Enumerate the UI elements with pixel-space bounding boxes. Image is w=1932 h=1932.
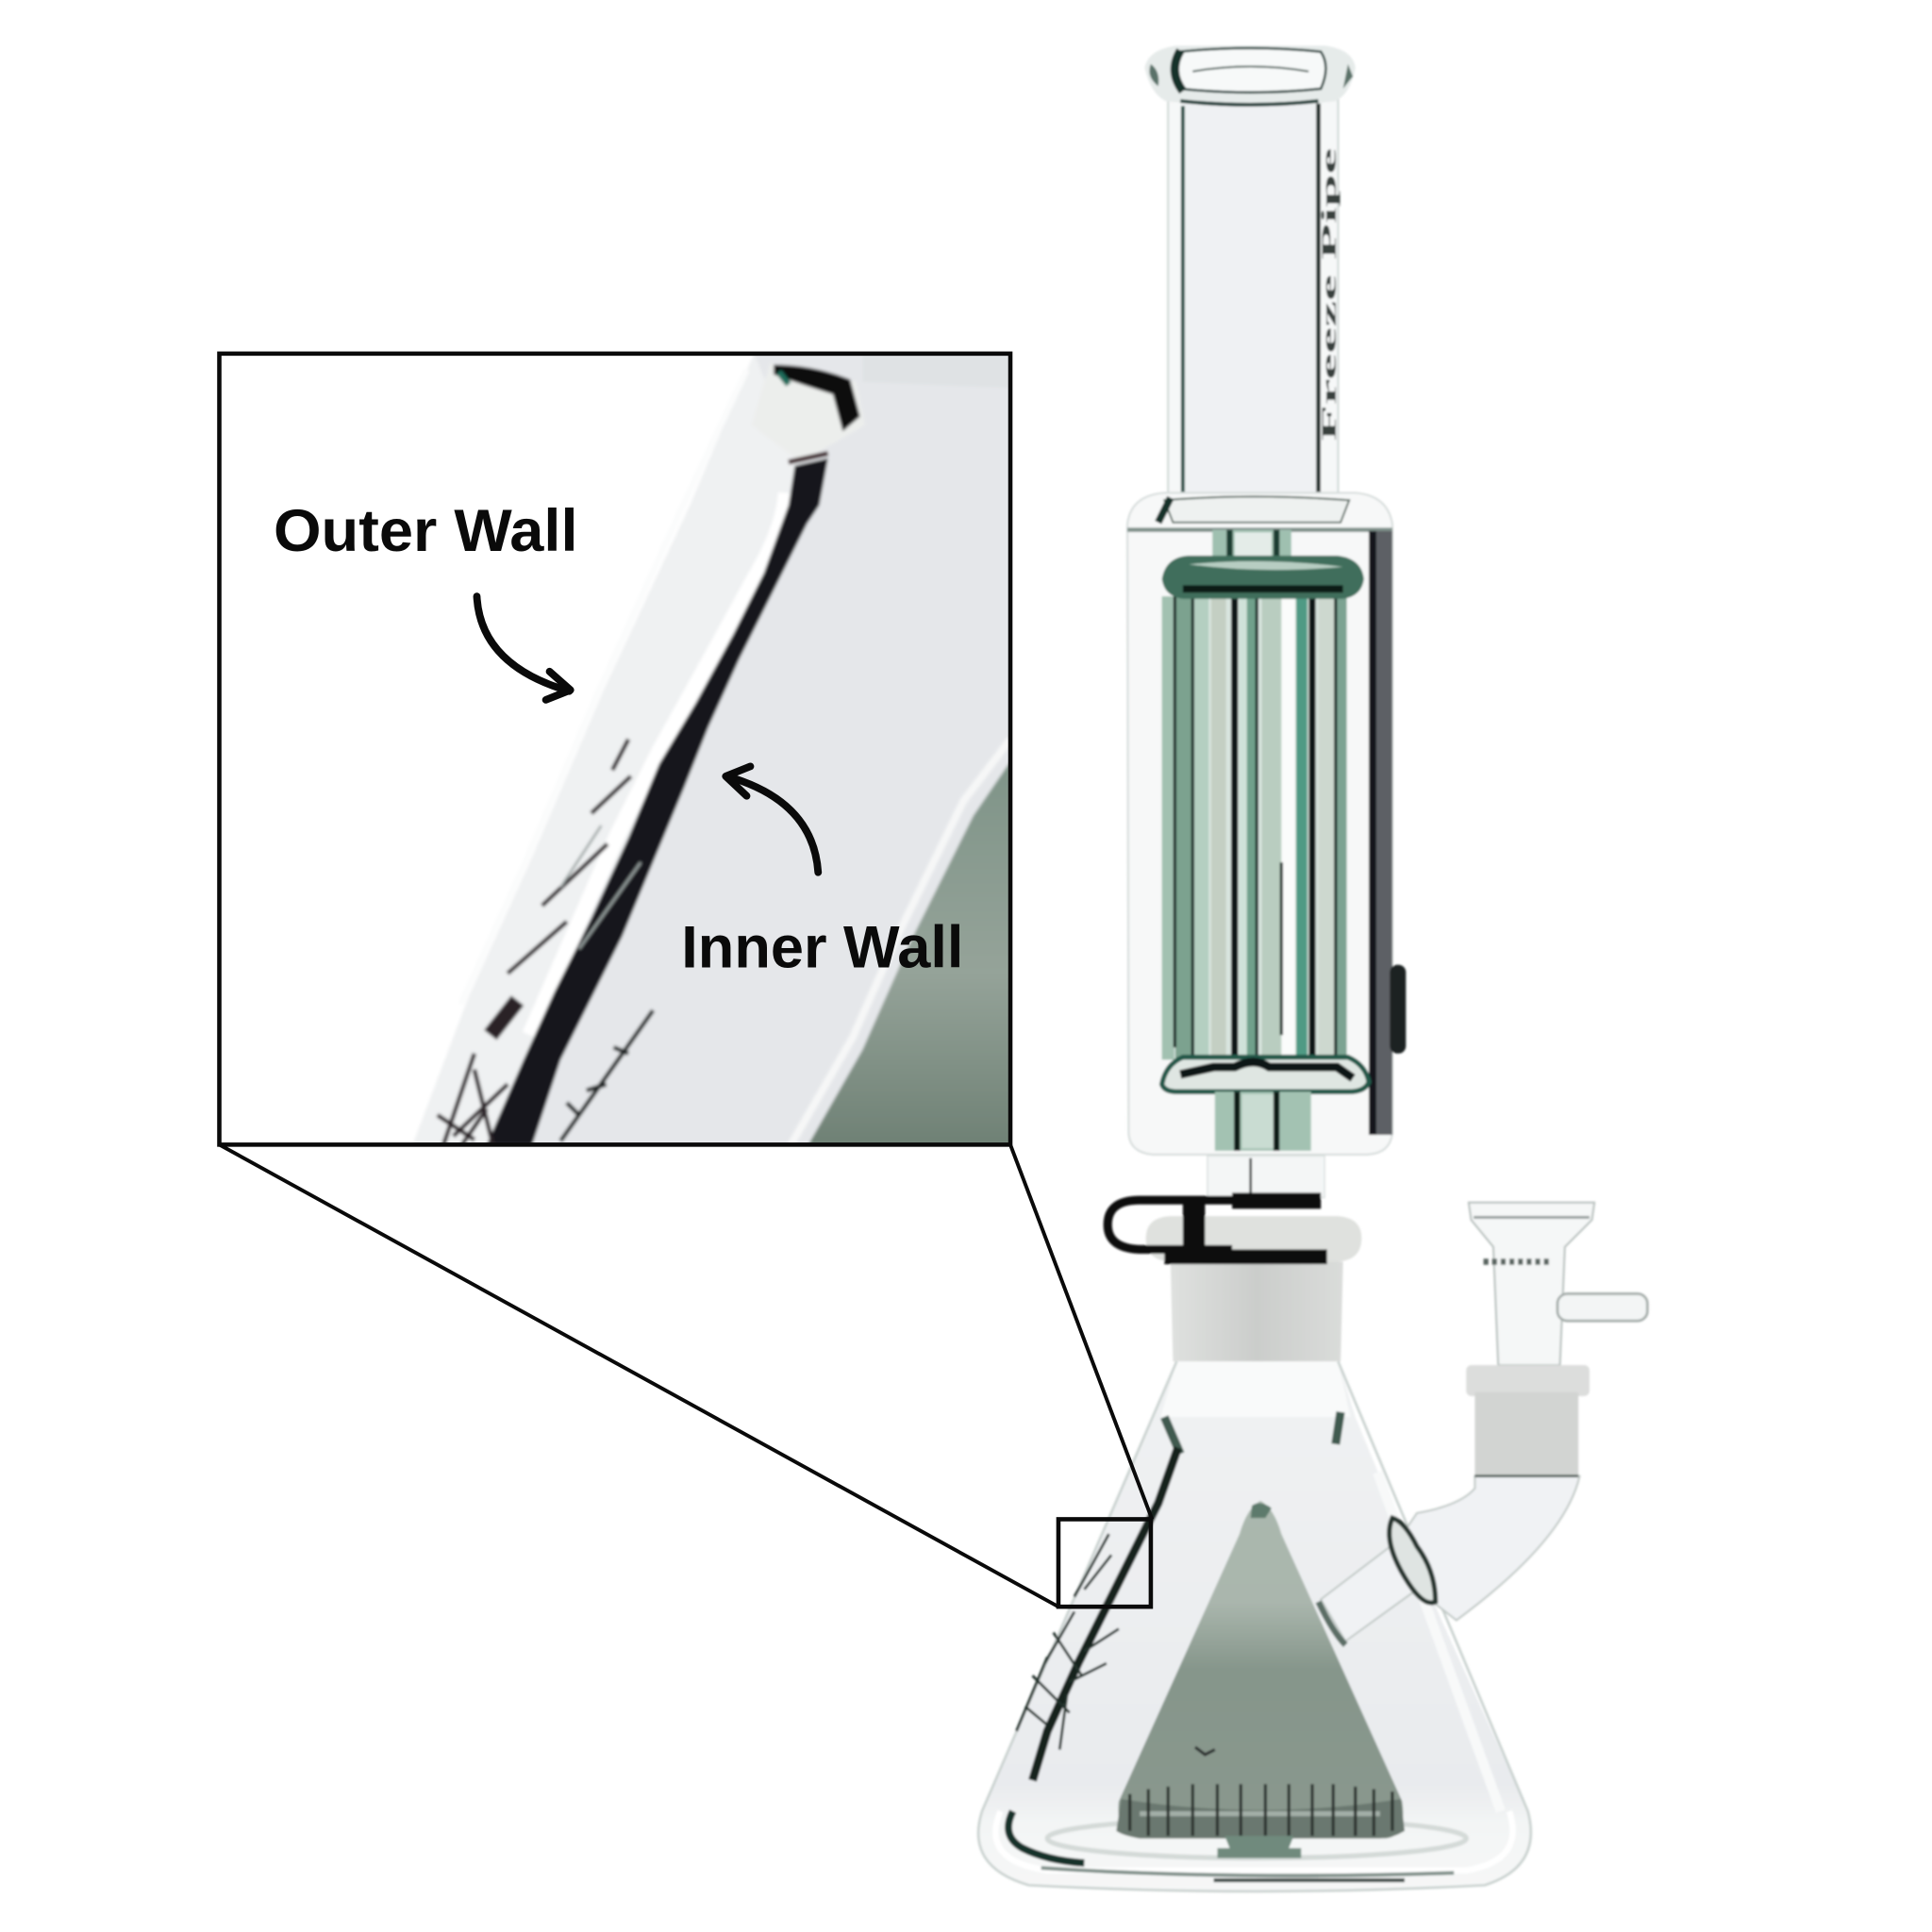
beaker base glass xyxy=(978,1361,1531,1891)
callout: connector lines to magnified view xyxy=(219,1144,1152,1607)
heading label: Inner Wall: Inner Wall xyxy=(681,914,963,980)
arrow: to outer wall xyxy=(476,596,571,700)
mouthpiece collar xyxy=(1144,45,1356,106)
arrow: to inner wall xyxy=(725,766,818,873)
black keck clip xyxy=(1108,1192,1327,1264)
ground joint stem xyxy=(1146,1156,1361,1361)
chamber knob xyxy=(1390,965,1406,1054)
callout: small detail box on beaker xyxy=(1058,1519,1151,1607)
sealed top of wall xyxy=(802,380,855,425)
dark back wall of chamber xyxy=(1375,531,1392,1135)
frosted female joint xyxy=(1466,1365,1590,1476)
etched branches xyxy=(438,740,653,1144)
tube stripes xyxy=(1162,596,1174,1059)
white highlight xyxy=(530,492,786,1035)
joint and bowl on side arm xyxy=(1466,1203,1647,1476)
heading label: Outer Wall: Outer Wall xyxy=(274,498,578,564)
outer wall band xyxy=(413,354,801,1144)
cone percolator xyxy=(1116,1501,1405,1858)
green percolator wedge xyxy=(808,761,1010,1144)
infographic canvas xyxy=(217,45,1650,1894)
vertical brand text on neck: Freeze Pipe xyxy=(1317,147,1341,441)
black inner wall line xyxy=(487,458,828,1144)
bowl xyxy=(1469,1203,1647,1365)
panel frame xyxy=(219,354,1010,1144)
percolator top manifold xyxy=(1162,556,1364,599)
photo: percolator water pipe xyxy=(978,45,1647,1891)
inner wall dark reflection xyxy=(1033,1448,1178,1780)
freezable chamber glass xyxy=(1127,492,1406,1155)
tree percolator arms xyxy=(1162,530,1369,1151)
percolator bottom manifold xyxy=(1162,1058,1369,1091)
panel: magnified wall detail xyxy=(219,354,1010,1144)
etched snowflake branches xyxy=(1017,1534,1119,1750)
side arm tube xyxy=(1319,1476,1579,1645)
magnified glass photo xyxy=(413,354,1010,1144)
glass body xyxy=(530,356,1008,1142)
upper neck tube xyxy=(1168,98,1341,495)
